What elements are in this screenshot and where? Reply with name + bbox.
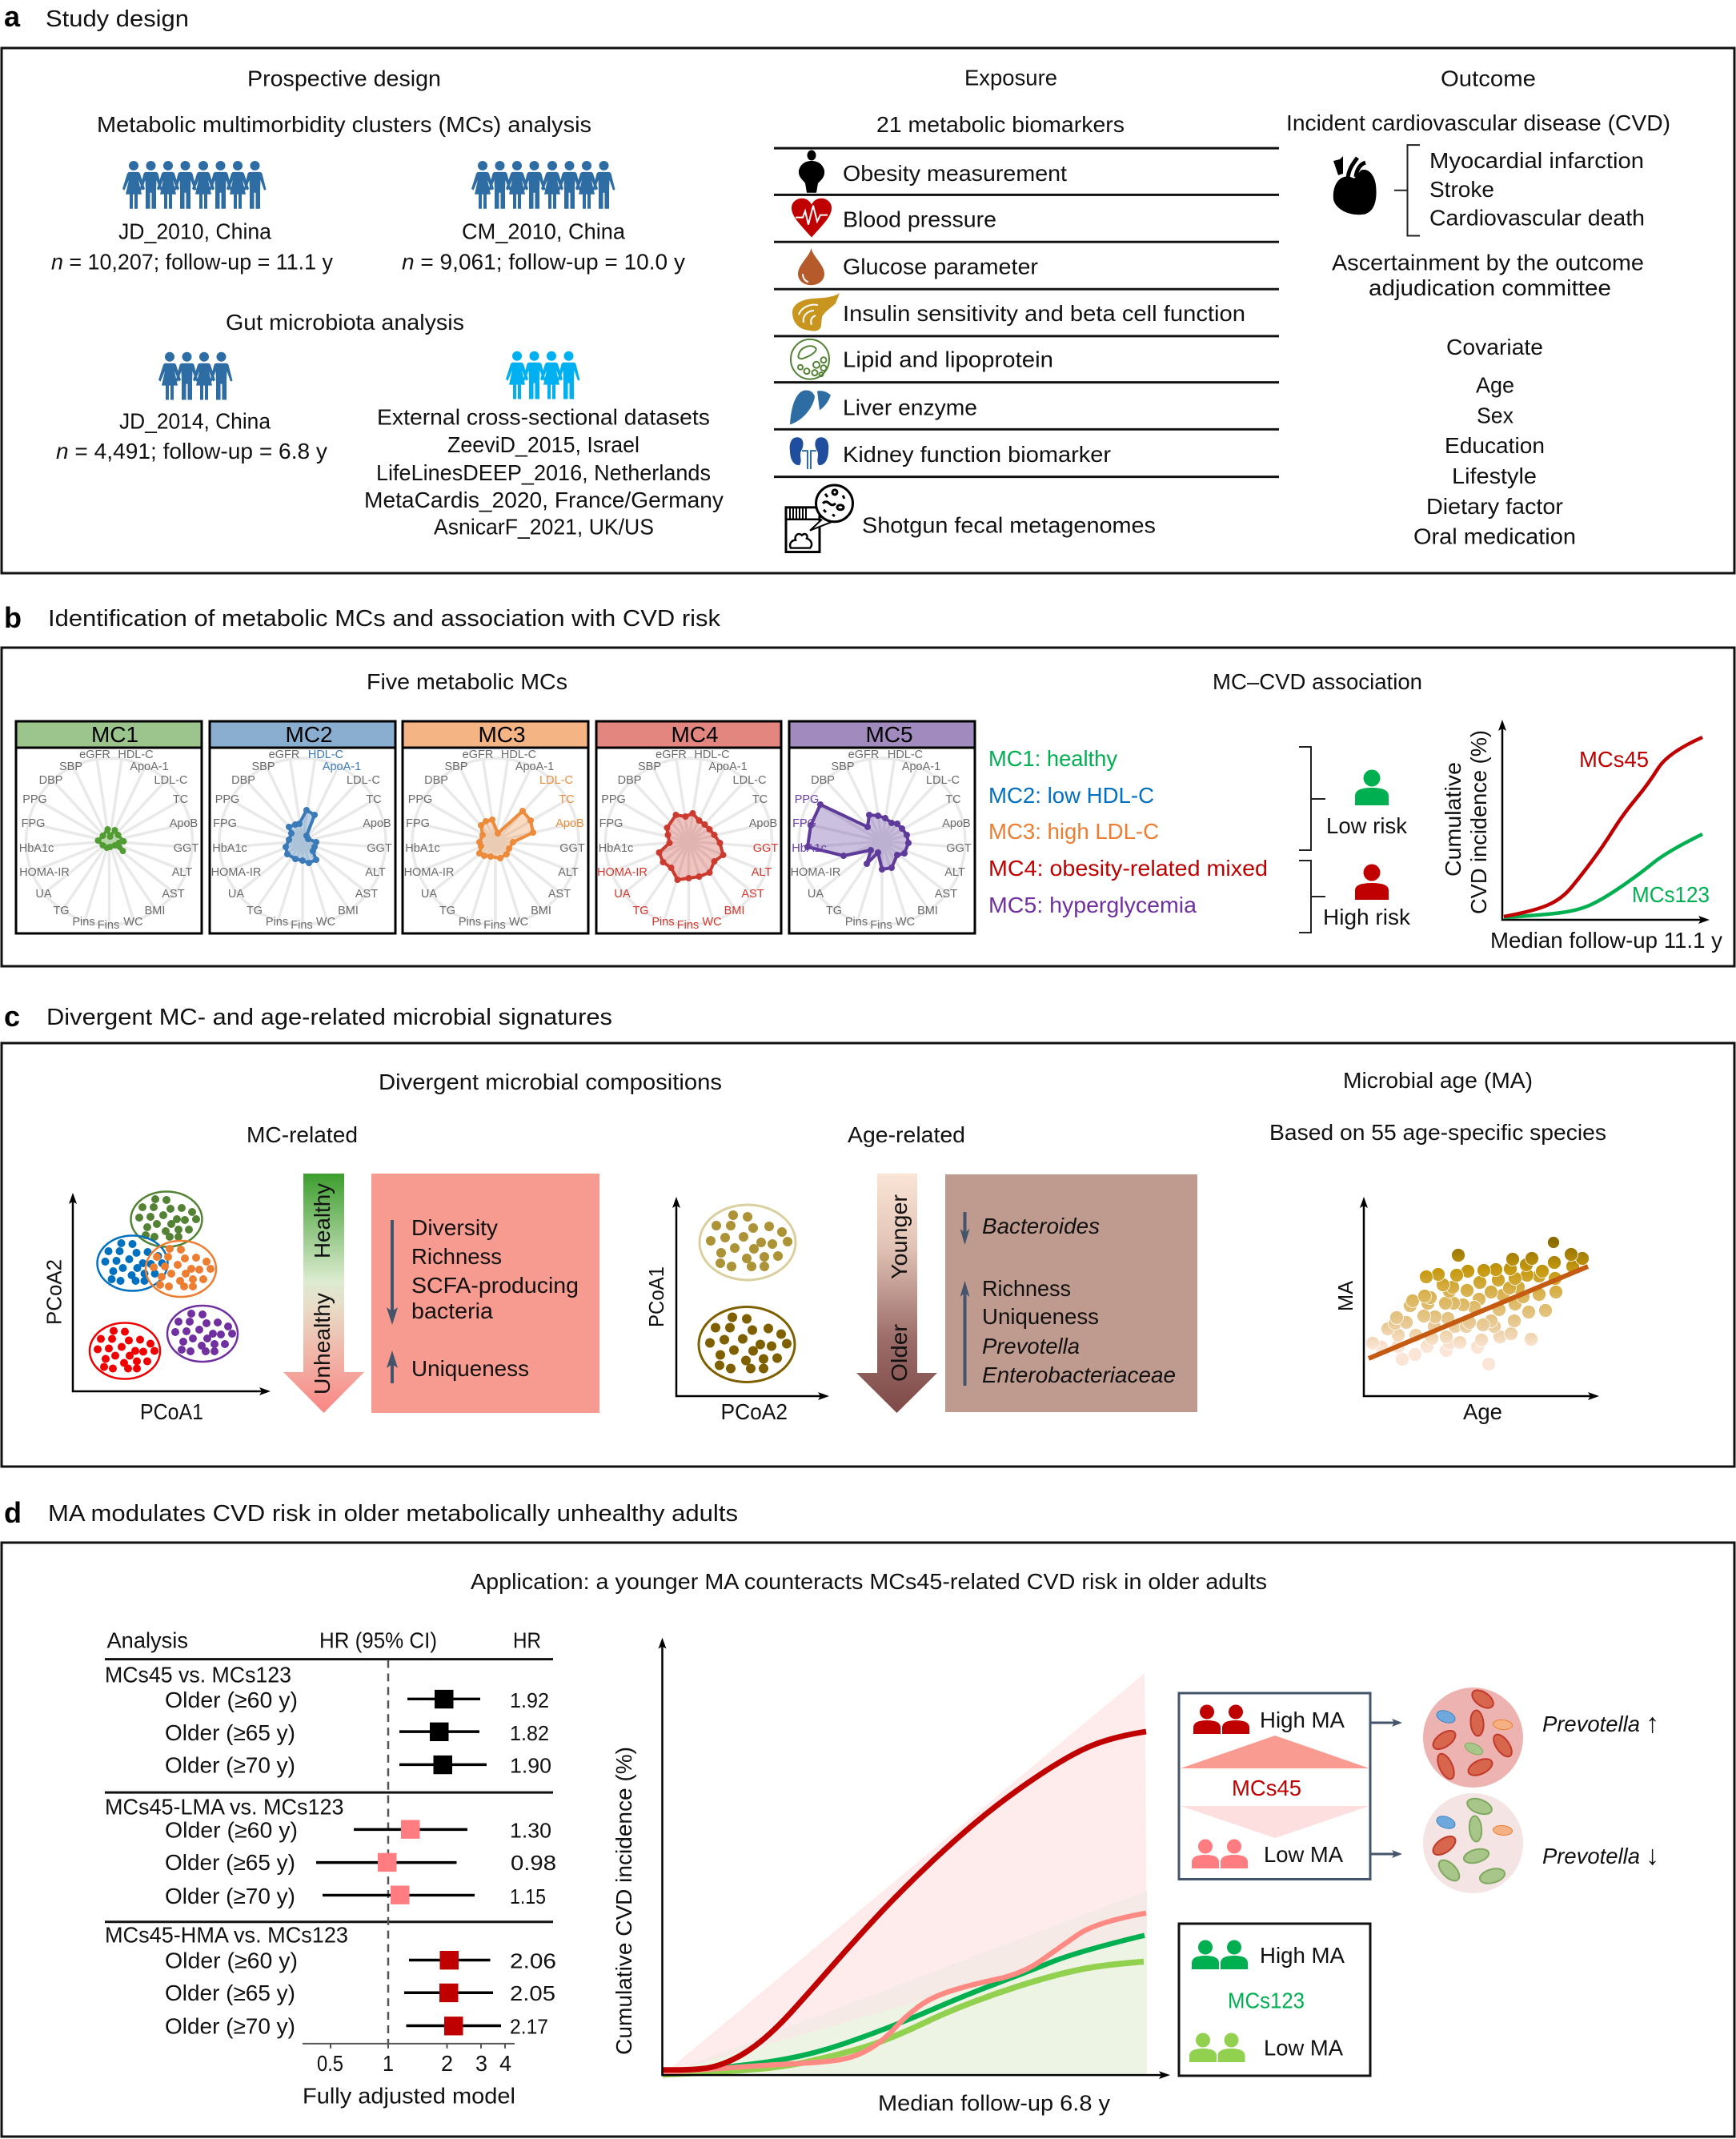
radar card: MC5: ApoB [942,817,971,830]
chart: MC-CVD cumulative incidence: MCs45 [1579,747,1649,772]
arrow: healthy to unhealthy: Healthy [310,1183,335,1258]
chart: age-related PCoA: PCoA2 [720,1399,788,1424]
radar card: MC1: GGT [174,842,198,855]
radar card: MC3: ApoB [555,817,584,830]
covariate list: Lifestyle [1452,464,1537,488]
radar card: MC4: eGFR [656,748,687,761]
radar card: MC4: ApoB [749,817,777,830]
radar card: MC1: FPG [22,817,45,830]
radar card: MC1: Pins [72,916,95,929]
heading: identification of MCs [4,601,721,634]
radar card: MC1: ApoA-1 [130,760,169,773]
radar card: MC2: HbA1c [212,842,247,855]
radar card: MC4: BMI [724,905,744,917]
chart: cumulative CVD incidence by MA: Median follow-up 6.8 y [878,2090,1110,2115]
radar card: MC4: HbA1c [599,842,633,855]
icon: blood pressure heart [792,199,832,238]
radar card: MC3: FPG [406,817,430,830]
icon: external dataset people [506,351,579,399]
incident CVD subheading: Incident cardiovascular disease (CVD) [1286,110,1670,135]
forest plot: 2.06 [510,1948,556,1972]
radar card: MC5: ALT [944,866,965,879]
forest plot: Older (≥60 y) [165,1817,298,1842]
radar card: MC2: ALT [365,866,386,879]
icon: high risk person [1355,865,1389,900]
radar card: MC5: LDL-C [926,774,960,787]
chart: age-related PCoA [644,1197,829,1424]
icon: liver [790,391,831,424]
covariate list: Sex [1477,403,1513,427]
lipid label: Lipid and lipoprotein [843,347,1053,372]
cohort CM_2010 text [402,219,685,274]
heading: divergent signatures: c [4,1000,20,1033]
heading: study design: Study design [46,6,189,32]
radar card: MC2: WC [316,916,335,929]
ascertainment note [1332,250,1644,300]
radar card: MC2: GGT [367,842,392,855]
label: Prevotella up [1542,1708,1659,1739]
radar card: MC1: PPG [22,793,47,806]
forest plot: 1.15 [510,1884,546,1908]
label: Prevotella up: Prevotella [1542,1712,1640,1736]
ascertainment note: adjudication committee [1369,275,1611,300]
icon: CM_2010 people [471,161,615,209]
forest plot: 2.17 [510,2015,548,2038]
radar card: MC5: Pins [845,916,868,929]
arrow: low MA to microbiome [1370,1850,1402,1858]
radar card: MC1: HbA1c [19,842,54,855]
covariate list: Oral medication [1413,524,1576,549]
arrow: younger to older [856,1174,937,1413]
panel: c microbial signatures [2,1000,1734,1467]
heading: MA modulates CVD risk: d [4,1496,22,1529]
label: Prevotella down: ↓ [1646,1840,1659,1871]
icon: fecal sample tube [786,485,853,552]
radar card: MC3: BMI [531,905,551,917]
insulin label: Insulin sensitivity and beta cell function [843,301,1245,326]
covariate list: Dietary factor [1426,494,1563,519]
forest plot: Older (≥60 y) [165,1948,298,1972]
forest plot: Older (≥70 y) [165,2014,295,2038]
outcome list [1429,148,1645,231]
box: age-related changes: Prevotella [982,1334,1080,1358]
radar card: MC4: HOMA-IR [597,866,647,879]
radar card: MC5: PPG [795,793,819,806]
forest plot: HR [513,1628,541,1653]
legend box: MCs45 [1179,1693,1370,1880]
radar card: MC3: Fins [483,919,506,932]
panel frame b [2,648,1734,966]
radar card: MC2: LDL-C [347,774,380,787]
radar card: MC3: GGT [559,842,585,855]
heading: study design: a [4,0,21,33]
chart: MC-CVD cumulative incidence: MCs123 [1632,882,1710,907]
outcome heading: Outcome [1441,66,1536,90]
arrow: healthy to unhealthy [283,1174,364,1413]
low risk label: Low risk [1326,813,1408,838]
radar card: MC2: SBP [251,760,275,773]
covariate heading: Covariate [1446,335,1543,359]
radar card: MC1: WC [123,916,143,929]
radar card: MC1 [16,721,202,933]
radar card: MC1: SBP [59,760,82,773]
arrow: high MA to microbiome [1370,1719,1402,1727]
external datasets list: MetaCardis_2020, France/Germany [364,488,724,512]
forest plot: Older (≥65 y) [165,1980,295,2005]
box: MC-related changes [371,1174,599,1413]
radar card: MC4: TG [632,905,649,917]
panel frame c [2,1043,1734,1467]
radar card: MC3: MC3 [478,722,526,747]
divergent compositions heading: Divergent microbial compositions [379,1070,722,1094]
external datasets list: AsnicarF_2021, UK/US [434,515,654,540]
radar card: MC5: eGFR [848,748,879,761]
radar card: MC5: TG [826,905,842,917]
cohort JD_2014 text: n = 4,491; follow-up = 6.8 y [56,439,327,464]
icon: obesity figure [799,150,824,193]
MC analysis subheading: Metabolic multimorbidity clusters (MCs) analysis [97,112,591,137]
radar card: MC4: HDL-C [694,748,730,761]
radar card: MC4: SBP [638,760,661,773]
radar card: MC4: PPG [601,793,626,806]
label: Prevotella down: Prevotella [1542,1844,1640,1868]
radar card: MC4: FPG [599,817,623,830]
glucose label: Glucose parameter [843,254,1038,279]
radar card: MC3: Pins [459,916,481,929]
radar card: MC4: Fins [677,919,699,932]
radar card: MC5 [789,721,975,933]
forest plot: Older (≥70 y) [165,1884,295,1908]
cohort JD_2014 text: JD_2014, China [119,408,271,433]
low risk bracket [1299,747,1325,850]
radar card: MC2: TC [366,793,382,806]
forest plot [105,1628,556,2108]
blood pressure label: Blood pressure [843,207,996,232]
radar card: MC3: eGFR [463,748,493,761]
chart: MC-CVD cumulative incidence: CVD incidence (%) [1466,730,1491,914]
chart: MC-related PCoA: PCoA2 [42,1259,66,1325]
chart: MC-CVD cumulative incidence: Cumulative [1441,762,1465,877]
heading: divergent signatures: Divergent MC- and age-related microbial signatures [46,1005,612,1030]
radar card: MC2: PPG [215,793,239,806]
kidney label: Kidney function biomarker [843,442,1111,467]
radar card: MC3: DBP [424,774,448,787]
radar card: MC1: AST [162,888,185,901]
radar card: MC3: TC [559,793,575,806]
chart: age-related PCoA: PCoA1 [644,1266,668,1327]
forest plot: MCs45-HMA vs. MCs123 [105,1923,348,1948]
radar card: MC5: MC5 [865,722,913,747]
radar card: MC4: LDL-C [733,774,766,787]
forest plot: Older (≥65 y) [165,1720,295,1745]
radar card: MC5: HDL-C [888,748,923,761]
icon: JD_2010 people [122,161,266,209]
chart: MC-related PCoA [42,1191,271,1424]
forest plot: Older (≥60 y) [165,1688,298,1712]
box: age-related changes [945,1174,1197,1412]
radar card: MC1: MC1 [91,722,138,747]
forest plot: 2.05 [510,1981,555,2005]
radar card: MC5: Fins [870,919,892,932]
chart: MC-CVD cumulative incidence: Median follow-up 11.1 y [1490,928,1722,953]
exposure heading: Exposure [964,66,1057,90]
legend box: MCs45: Low MA [1264,1842,1343,1867]
box: MC-related changes: Diversity [411,1215,498,1240]
legend box: MCs123 [1179,1924,1370,2076]
radar card: MC1: ApoB [170,817,198,830]
outcome bracket [1394,145,1420,236]
heading: identification of MCs: Identification of metabolic MCs and association with CVD risk [48,606,721,632]
radar card: MC3: SBP [444,760,468,773]
external datasets list: ZeeviD_2015, Israel [447,432,639,457]
radar card: MC2: FPG [213,817,237,830]
high risk label: High risk [1323,905,1411,929]
radar card: MC5: GGT [946,842,972,855]
legend box: MCs45: MCs45 [1232,1776,1301,1800]
icon: anatomical heart [1333,156,1377,215]
MC-related heading: MC-related [247,1122,358,1147]
covariate list: Age [1476,373,1514,398]
outcome list: Myocardial infarction [1429,148,1644,173]
forest plot: 1.30 [510,1818,551,1842]
forest plot: Analysis [107,1628,188,1653]
radar card: MC5: DBP [811,774,835,787]
radar card: MC1: BMI [145,905,165,917]
cohort JD_2014 text [56,408,327,464]
radar card: MC2: Fins [291,919,313,932]
panel frame a [2,48,1734,573]
radar card: MC1: HOMA-IR [19,866,70,879]
heading: MA modulates CVD risk: MA modulates CVD risk in older metabolically unhealthy adults [48,1501,738,1527]
radar card: MC3: HOMA-IR [404,866,454,879]
radar card: MC2: Pins [266,916,288,929]
panel: b metabolic MCs and CVD risk [2,601,1734,966]
forest plot: Older (≥70 y) [165,1752,295,1777]
MC legend: MC4: obesity-related mixed [988,856,1268,881]
forest plot: 1.82 [510,1721,549,1745]
five MCs heading: Five metabolic MCs [367,669,567,694]
external datasets list [364,404,724,540]
chart: microbial age scatter: Age [1463,1399,1502,1424]
radar card: MC4: Pins [652,916,675,929]
box: age-related changes: Uniqueness [982,1304,1099,1329]
radar card: MC5: UA [808,888,824,901]
MC legend: MC5: hyperglycemia [988,893,1197,917]
MC legend [988,746,1268,917]
radar card: MC4: GGT [753,842,778,855]
icon: low risk person [1355,770,1389,805]
fecal metagenomes label: Shotgun fecal metagenomes [862,513,1156,538]
radar card: MC3: HDL-C [501,748,536,761]
box: age-related changes: Richness [982,1276,1071,1301]
radar card: MC2: BMI [338,905,359,917]
external datasets list: LifeLinesDEEP_2016, Netherlands [376,460,711,485]
radar card: MC4 [596,721,781,933]
radar card: MC5: HbA1c [792,842,827,855]
forest plot: 1.90 [510,1753,551,1777]
forest plot: MCs45 vs. MCs123 [105,1662,291,1687]
radar card: MC4: AST [741,888,764,901]
radar card: MC5: FPG [792,817,816,830]
icon: glucose drop [798,247,824,285]
age-related heading: Age-related [848,1122,965,1147]
outcome list: Cardiovascular death [1429,206,1645,231]
chart: MC-related PCoA: PCoA1 [140,1399,203,1424]
microbial age heading: Microbial age (MA) [1343,1068,1533,1093]
radar card: MC4: MC4 [671,722,719,747]
forest plot: 1 [383,2051,394,2076]
radar card: MC1: LDL-C [154,774,187,787]
chart: cumulative CVD incidence by MA [611,1638,1170,2115]
box: MC-related changes: Richness [411,1244,502,1269]
radar card: MC1: DBP [39,774,62,787]
chart: microbial age scatter: MA [1333,1280,1357,1311]
radar card: MC3: PPG [408,793,432,806]
radar card: MC2: DBP [231,774,255,787]
covariate list [1413,373,1576,549]
55 species subheading: Based on 55 age-specific species [1269,1120,1606,1145]
radar card: MC5: ApoA-1 [902,760,940,773]
radar card: MC1: eGFR [79,748,110,761]
prospective design heading: Prospective design [247,66,441,90]
forest plot: 2 [441,2051,453,2076]
panel: d MA modulates CVD risk [2,1496,1734,2137]
radar card: MC3: ALT [558,866,579,879]
heading: study design [4,0,189,33]
biomarkers subheading: 21 metabolic biomarkers [876,112,1125,137]
radar card: MC2: AST [355,888,378,901]
radar card: MC3: WC [509,916,528,929]
radar card: MC5: WC [896,916,915,929]
radar card: MC1: ALT [172,866,192,879]
forest plot: 4 [499,2051,511,2076]
legend box: MCs45: High MA [1260,1708,1345,1732]
microbiome circle: low MA [1423,1793,1523,1893]
radar card: MC3: LDL-C [539,774,573,787]
box: MC-related changes: bacteria [411,1298,493,1323]
legend box: MCs123: MCs123 [1228,1989,1305,2013]
radar card: MC4: DBP [618,774,641,787]
radar card: MC3: HbA1c [405,842,440,855]
radar card: MC4: ApoA-1 [708,760,748,773]
label: Prevotella up: ↑ [1646,1708,1659,1739]
icon: pancreas [792,293,840,331]
chart: cumulative CVD incidence by MA: Cumulative CVD incidence (%) [611,1747,636,2055]
icon: lipid cell [791,339,829,379]
radar card: MC1: UA [35,888,52,901]
radar card: MC3: TG [439,905,455,917]
icon: JD_2014 people [158,352,232,399]
radar card: MC5: SBP [831,760,855,773]
forest plot: 0.5 [317,2051,343,2076]
radar card: MC2: MC2 [285,722,333,747]
chart: MC-CVD cumulative incidence [1441,720,1722,953]
cohort JD_2010 text: JD_2010, China [118,219,271,243]
arrow: younger to older: Younger [887,1194,912,1279]
box: MC-related changes: SCFA-producing [411,1273,579,1298]
arrow: younger to older: Older [887,1324,912,1382]
heading: MA modulates CVD risk [4,1496,738,1529]
forest plot: Older (≥65 y) [165,1850,295,1875]
cohort CM_2010 text: CM_2010, China [462,219,625,243]
radar card: MC4: TC [752,793,768,806]
legend box: MCs123: Low MA [1264,2035,1343,2061]
forest plot: 3 [475,2051,487,2076]
radar card: MC3: UA [421,888,437,901]
high risk bracket [1299,861,1325,933]
box: MC-related changes: Uniqueness [411,1356,529,1381]
MC legend: MC1: healthy [988,746,1117,771]
gut microbiota subheading: Gut microbiota analysis [226,310,464,335]
label: Prevotella down [1542,1840,1659,1871]
cohort CM_2010 text: n = 9,061; follow-up = 10.0 y [402,249,685,274]
microbiome circle: high MA [1423,1687,1523,1788]
icon: kidneys [790,437,828,469]
MC legend: MC3: high LDL-C [988,819,1159,844]
radar card: MC1: HDL-C [118,748,154,761]
forest plot: HR (95% CI) [319,1628,437,1653]
arrow: healthy to unhealthy: Unhealthy [310,1293,335,1395]
box: age-related changes: Bacteroides [982,1214,1100,1238]
radar card: MC1: TG [53,905,70,917]
radar card: MC5: HOMA-IR [791,866,840,879]
panel frame d [2,1543,1734,2137]
radar card: MC2 [210,721,395,933]
MC-CVD association heading: MC–CVD association [1213,669,1422,694]
radar card: MC5: BMI [917,905,938,917]
outcome list: Stroke [1429,177,1494,202]
chart: microbial age scatter [1333,1197,1599,1424]
radar card: MC2: TG [247,905,263,917]
cohort JD_2010 text [51,219,333,274]
liver label: Liver enzyme [843,395,977,419]
radar card: MC2: ApoB [363,817,391,830]
radar card: MC4: WC [702,916,722,929]
radar card: MC2: ApoA-1 [323,760,361,773]
radar card: MC3: AST [548,888,571,901]
radar card: MC1: TC [173,793,188,806]
radar card: MC5: TC [945,793,961,806]
radar card: MC5: AST [935,888,957,901]
radar card: MC4: ALT [752,866,772,879]
box: age-related changes: Enterobacteriaceae [982,1362,1176,1387]
external datasets list: External cross-sectional datasets [377,404,710,429]
radar card: MC4: UA [614,888,631,901]
radar card: MC2: UA [228,888,244,901]
obesity label: Obesity measurement [843,161,1067,186]
cohort JD_2010 text: n = 10,207; follow-up = 11.1 y [51,249,333,274]
forest plot: MCs45-LMA vs. MCs123 [105,1795,343,1819]
forest plot: Fully adjusted model [303,2084,515,2108]
MC legend: MC2: low HDL-C [988,783,1154,808]
legend box: MCs123: High MA [1260,1943,1345,1968]
radar card: MC2: eGFR [269,748,299,761]
radar card: MC3 [403,721,588,933]
radar card: MC1: Fins [98,919,119,932]
radar card: MC2: HOMA-IR [211,866,261,879]
heading: divergent signatures [4,1000,612,1033]
ascertainment note: Ascertainment by the outcome [1332,250,1644,275]
radar card: MC2: HDL-C [308,748,343,761]
forest plot: 1.92 [510,1688,549,1712]
application title: Application: a younger MA counteracts MCs45-related CVD risk in older adults [471,1569,1267,1594]
covariate list: Education [1445,433,1545,458]
forest plot: 0.98 [511,1851,556,1875]
heading: identification of MCs: b [4,601,22,634]
radar card: MC3: ApoA-1 [515,760,554,773]
panel: a study design [2,0,1734,573]
